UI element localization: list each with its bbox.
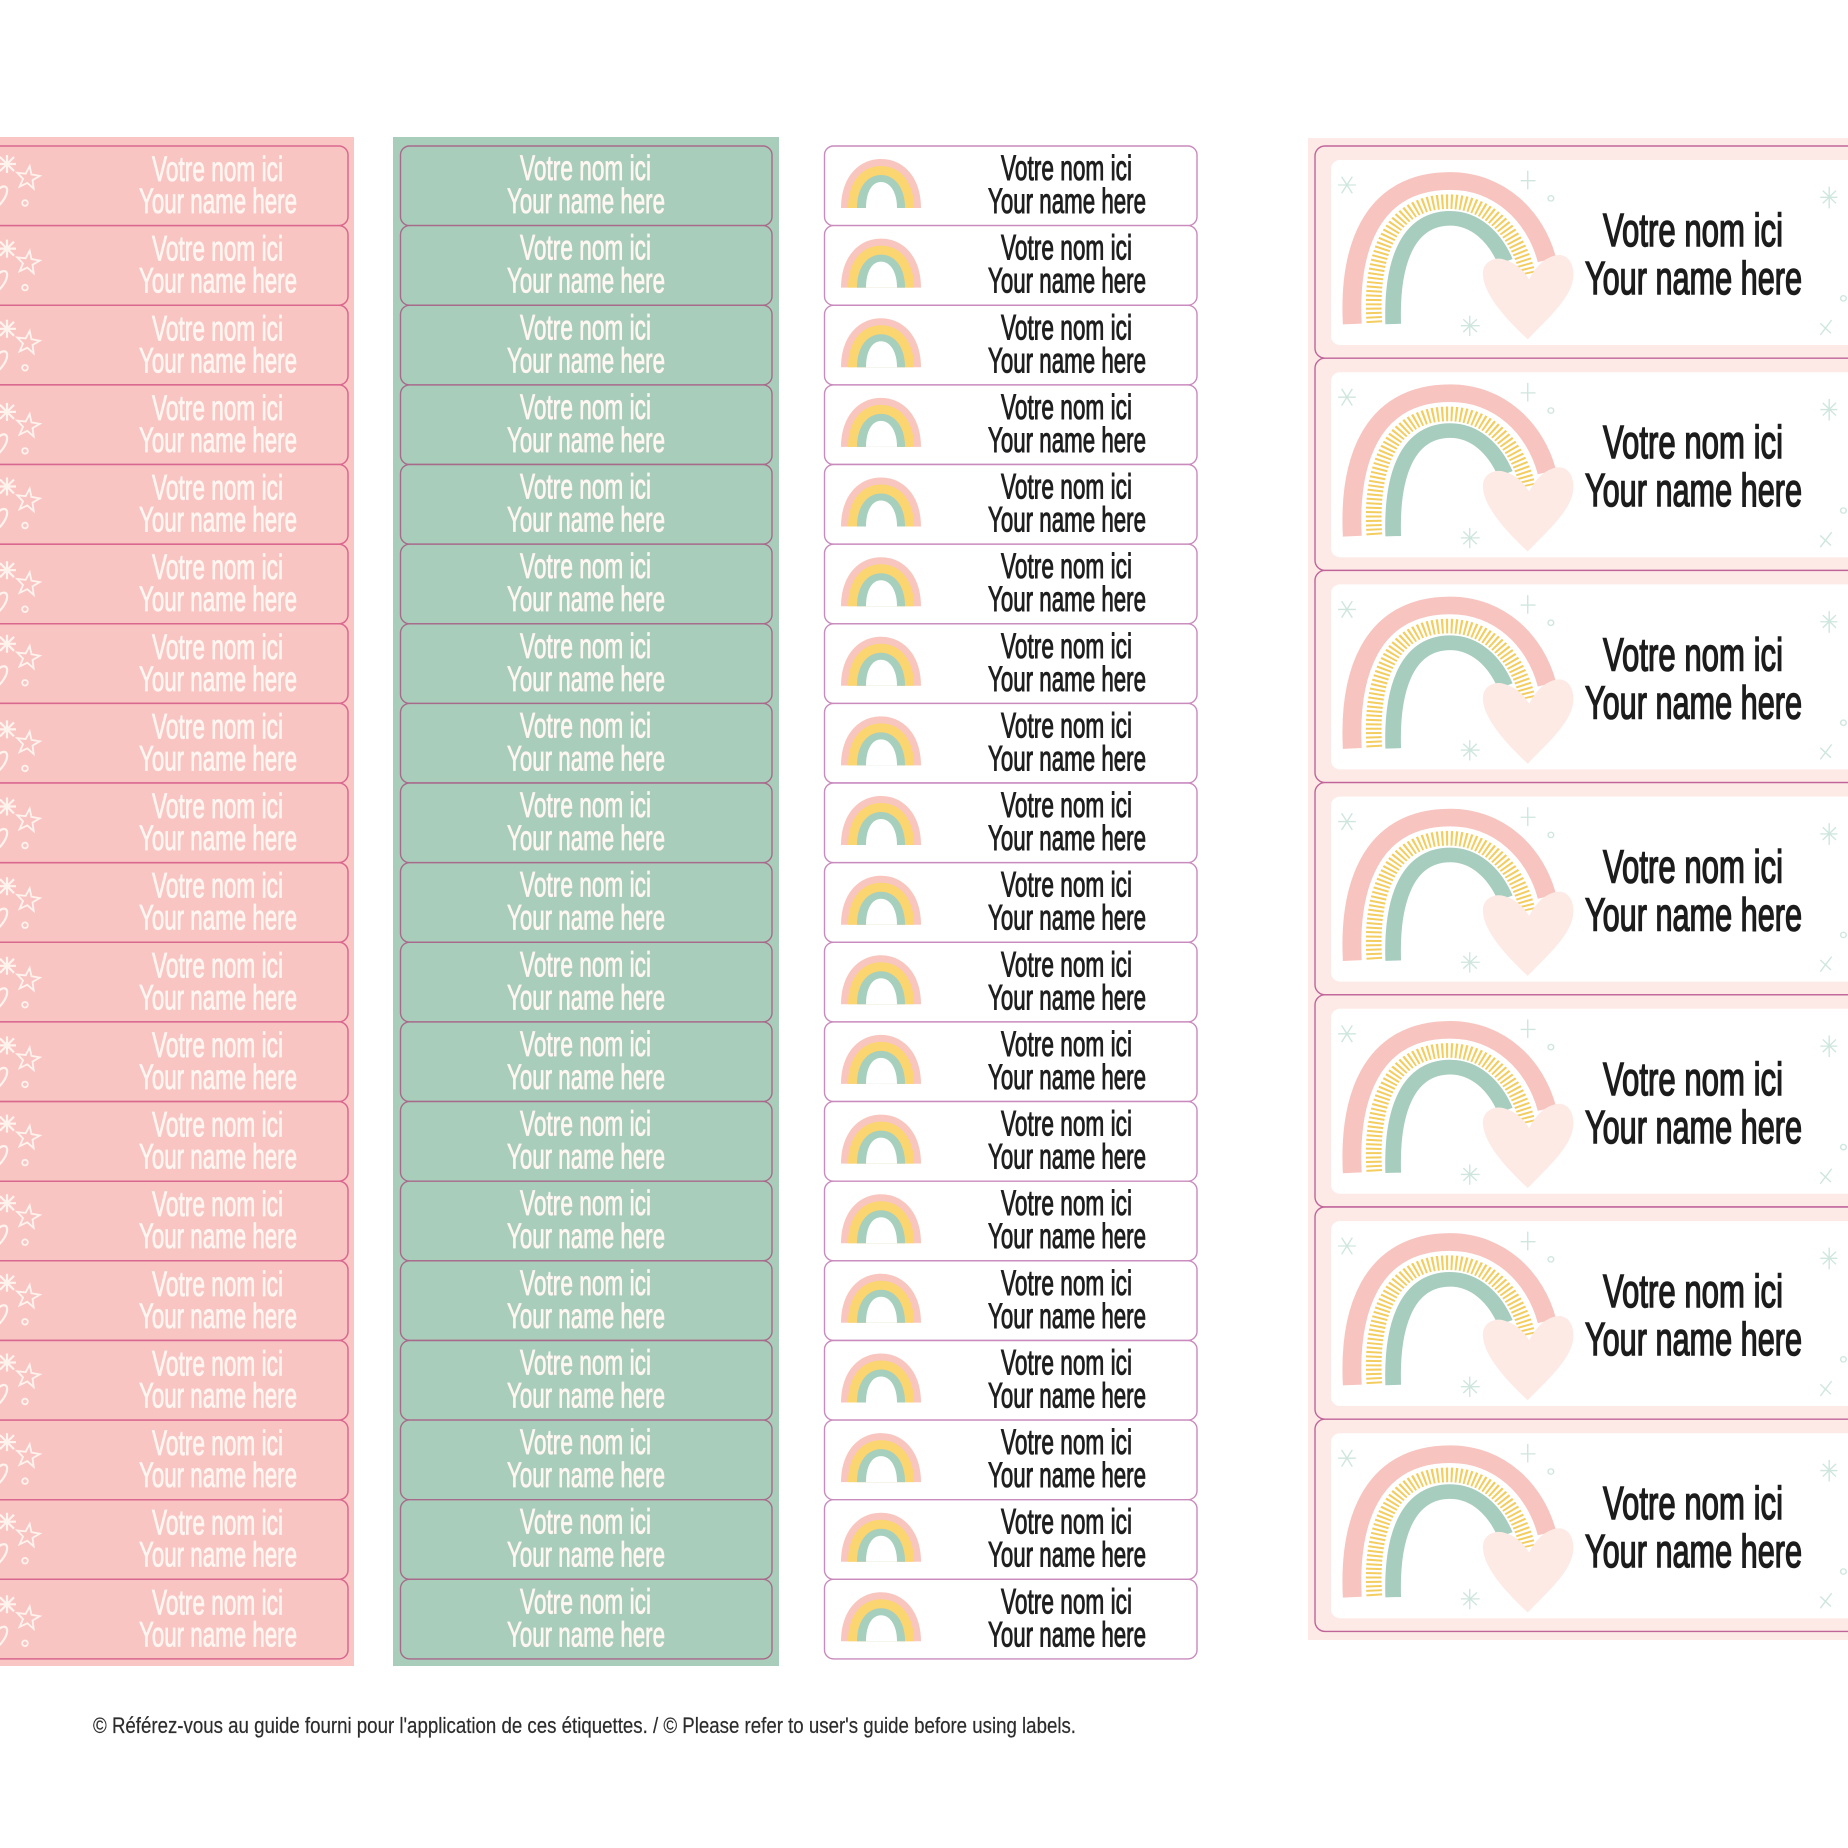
large label 6: [1315, 1207, 1848, 1419]
pink label 15: Votre nom ici: [152, 1265, 283, 1304]
pink label 6: [0, 544, 348, 624]
green label 2: [400, 226, 772, 305]
white label 9: [824, 783, 1197, 863]
pink label 12: Your name here: [139, 1058, 297, 1097]
pink label 9: Your name here: [139, 819, 297, 858]
pink label 18: [0, 1500, 348, 1579]
green label 4: Your name here: [507, 421, 665, 460]
pink label 14: [0, 1181, 348, 1261]
pink label 7: Your name here: [139, 660, 297, 699]
green label 19: Votre nom ici: [520, 1582, 651, 1621]
green label 19: Your name here: [507, 1615, 665, 1654]
white label 7: Your name here: [988, 660, 1146, 699]
white label 5: Your name here: [988, 500, 1146, 540]
green label 13: Your name here: [507, 1138, 665, 1177]
white label 19: [824, 1579, 1197, 1659]
white label 9: Votre nom ici: [1001, 786, 1132, 825]
pink label 6: Your name here: [139, 580, 297, 619]
panel: white labels column with small rainbows: [824, 146, 1197, 1659]
white label 13: [824, 1102, 1197, 1181]
large label 3: [1315, 570, 1848, 783]
green label 13: [400, 1102, 772, 1181]
pink label 5: [0, 464, 348, 544]
green label 19: [400, 1579, 772, 1659]
pink label 16: Your name here: [139, 1376, 297, 1416]
white label 17: [824, 1420, 1197, 1500]
green label 3: [400, 305, 772, 385]
white label 4: Votre nom ici: [1001, 388, 1132, 427]
pink label 9: [0, 783, 348, 863]
white label 15: Votre nom ici: [1001, 1264, 1132, 1303]
white label 16: Votre nom ici: [1001, 1344, 1132, 1382]
green label 15: [400, 1261, 772, 1340]
white label 14: [824, 1181, 1197, 1261]
green label 16: [400, 1340, 772, 1420]
pink label 13: Votre nom ici: [152, 1106, 283, 1145]
pink label 4: [0, 385, 348, 464]
green label 4: Votre nom ici: [520, 388, 651, 427]
pink label 8: Votre nom ici: [152, 707, 283, 746]
green label 7: [400, 624, 772, 703]
green label 8: [400, 703, 772, 783]
green label 3: Votre nom ici: [520, 308, 651, 347]
white label 1: Votre nom ici: [1001, 149, 1132, 188]
green label 1: [400, 146, 772, 226]
white label 10: Votre nom ici: [1001, 866, 1132, 905]
white label 8: Votre nom ici: [1001, 706, 1132, 745]
green label 5: Your name here: [507, 500, 665, 540]
white label 14: Your name here: [988, 1217, 1146, 1256]
white label 17: Your name here: [988, 1456, 1146, 1495]
pink label 13: Your name here: [139, 1138, 297, 1177]
green label 14: [400, 1181, 772, 1261]
pink label 13: [0, 1102, 348, 1181]
large label 7: [1315, 1419, 1848, 1631]
green label 15: Votre nom ici: [520, 1264, 651, 1303]
white label 19: Votre nom ici: [1001, 1582, 1132, 1621]
green label 16: Your name here: [507, 1376, 665, 1416]
white label 10: Your name here: [988, 899, 1146, 938]
pink label 1: Your name here: [139, 182, 297, 221]
white label 8: Your name here: [988, 739, 1146, 778]
white label 3: Your name here: [988, 341, 1146, 380]
green label 17: [400, 1420, 772, 1500]
white label 16: Your name here: [988, 1376, 1146, 1416]
pink label 2: Your name here: [139, 262, 297, 301]
pink label 11: Your name here: [139, 978, 297, 1017]
white label 2: Votre nom ici: [1001, 229, 1132, 268]
pink label 10: Your name here: [139, 899, 297, 938]
pink label 15: [0, 1261, 348, 1340]
green label 12: [400, 1022, 772, 1102]
large label 4: [1315, 783, 1848, 995]
white label 6: [824, 544, 1197, 624]
green label 5: Votre nom ici: [520, 468, 651, 506]
pink label 19: Your name here: [139, 1615, 297, 1654]
pink label 7: [0, 624, 348, 703]
large label 1: [1315, 146, 1848, 358]
white label 13: Your name here: [988, 1138, 1146, 1177]
white label 12: Votre nom ici: [1001, 1025, 1132, 1064]
white label 13: Votre nom ici: [1001, 1105, 1132, 1144]
green label 3: Your name here: [507, 341, 665, 380]
pink label 3: Votre nom ici: [152, 309, 283, 348]
white label 10: [824, 863, 1197, 942]
pink label 14: Votre nom ici: [152, 1185, 283, 1224]
white label 6: Votre nom ici: [1001, 547, 1132, 586]
panel: pink labels column: [0, 137, 354, 1666]
pink label 16: [0, 1340, 348, 1420]
green label 16: Votre nom ici: [520, 1344, 651, 1382]
green label 14: Your name here: [507, 1217, 665, 1256]
white label 4: [824, 385, 1197, 464]
white label 6: Your name here: [988, 580, 1146, 619]
green label 6: Votre nom ici: [520, 547, 651, 586]
white label 18: [824, 1500, 1197, 1579]
green label 5: [400, 464, 772, 544]
green label 2: Your name here: [507, 262, 665, 301]
pink label 18: Your name here: [139, 1536, 297, 1575]
green label 6: [400, 544, 772, 624]
white label 7: [824, 624, 1197, 703]
green label 2: Votre nom ici: [520, 229, 651, 268]
green label 12: Votre nom ici: [520, 1025, 651, 1064]
pink label 5: Votre nom ici: [152, 468, 283, 508]
white label 11: Votre nom ici: [1001, 945, 1132, 984]
white label 1: Your name here: [988, 182, 1146, 221]
pink label 10: Votre nom ici: [152, 867, 283, 906]
white label 12: Your name here: [988, 1058, 1146, 1097]
pink label 8: Your name here: [139, 739, 297, 778]
pink label 11: [0, 942, 348, 1022]
pink label 15: Your name here: [139, 1297, 297, 1336]
pink label 11: Votre nom ici: [152, 946, 283, 985]
green label 9: Votre nom ici: [520, 786, 651, 825]
white label 17: Votre nom ici: [1001, 1423, 1132, 1462]
pink label 19: [0, 1579, 348, 1659]
large label 5: [1315, 995, 1848, 1207]
pink label 2: Votre nom ici: [152, 230, 283, 269]
pink label 4: Votre nom ici: [152, 389, 283, 428]
pink label 12: Votre nom ici: [152, 1026, 283, 1065]
panel: green labels column: [393, 137, 779, 1666]
white label 3: Votre nom ici: [1001, 308, 1132, 347]
white label 16: [824, 1340, 1197, 1420]
pink label 3: [0, 305, 348, 385]
green label 8: Votre nom ici: [520, 706, 651, 745]
green label 18: Votre nom ici: [520, 1503, 651, 1542]
white label 15: [824, 1261, 1197, 1340]
white label 12: [824, 1022, 1197, 1102]
white label 4: Your name here: [988, 421, 1146, 460]
white label 3: [824, 305, 1197, 385]
footer note: © Référez-vous au guide fourni pour l'application de ces étiquettes. / © Please refer to user's guide before using labels.: [93, 1713, 1076, 1738]
green label 17: Your name here: [507, 1456, 665, 1495]
green label 10: [400, 863, 772, 942]
pink label 18: Votre nom ici: [152, 1504, 283, 1543]
green label 8: Your name here: [507, 739, 665, 778]
white label 5: Votre nom ici: [1001, 468, 1132, 506]
white label 1: [824, 146, 1197, 226]
white label 8: [824, 703, 1197, 783]
white label 18: Votre nom ici: [1001, 1503, 1132, 1542]
white label 14: Votre nom ici: [1001, 1184, 1132, 1223]
pink label 6: Votre nom ici: [152, 548, 283, 587]
green label 11: Votre nom ici: [520, 945, 651, 984]
pink label 12: [0, 1022, 348, 1102]
pink label 14: Your name here: [139, 1217, 297, 1256]
green label 10: Votre nom ici: [520, 866, 651, 905]
pink label 5: Your name here: [139, 500, 297, 540]
pink label 1: [0, 146, 348, 226]
green label 14: Votre nom ici: [520, 1184, 651, 1223]
green label 1: Your name here: [507, 182, 665, 221]
white label 9: Your name here: [988, 819, 1146, 858]
white label 18: Your name here: [988, 1536, 1146, 1575]
white label 19: Your name here: [988, 1615, 1146, 1654]
pink label 16: Votre nom ici: [152, 1344, 283, 1384]
white label 2: Your name here: [988, 262, 1146, 301]
white label 2: [824, 226, 1197, 305]
pink label 17: Your name here: [139, 1456, 297, 1495]
pink label 17: [0, 1420, 348, 1500]
pink label 1: Votre nom ici: [152, 150, 283, 189]
pink label 9: Votre nom ici: [152, 787, 283, 826]
white label 5: [824, 464, 1197, 544]
green label 7: Your name here: [507, 660, 665, 699]
white label 11: [824, 942, 1197, 1022]
green label 6: Your name here: [507, 580, 665, 619]
pink label 4: Your name here: [139, 421, 297, 460]
pink label 19: Votre nom ici: [152, 1583, 283, 1622]
green label 9: [400, 783, 772, 863]
green label 18: Your name here: [507, 1536, 665, 1575]
green label 4: [400, 385, 772, 464]
green label 11: [400, 942, 772, 1022]
pink label 8: [0, 703, 348, 783]
pink label 3: Your name here: [139, 341, 297, 380]
green label 1: Votre nom ici: [520, 149, 651, 188]
pink label 10: [0, 863, 348, 942]
white label 15: Your name here: [988, 1297, 1146, 1336]
green label 15: Your name here: [507, 1297, 665, 1336]
green label 10: Your name here: [507, 899, 665, 938]
pink label 2: [0, 226, 348, 305]
green label 7: Votre nom ici: [520, 627, 651, 666]
panel: large rainbow labels column: [1308, 138, 1848, 1640]
green label 12: Your name here: [507, 1058, 665, 1097]
green label 17: Votre nom ici: [520, 1423, 651, 1462]
large label 2: [1315, 358, 1848, 570]
green label 13: Votre nom ici: [520, 1105, 651, 1144]
green label 11: Your name here: [507, 978, 665, 1017]
white label 11: Your name here: [988, 978, 1146, 1017]
white label 7: Votre nom ici: [1001, 627, 1132, 666]
pink label 7: Votre nom ici: [152, 628, 283, 667]
green label 9: Your name here: [507, 819, 665, 858]
green label 18: [400, 1500, 772, 1579]
pink label 17: Votre nom ici: [152, 1424, 283, 1463]
